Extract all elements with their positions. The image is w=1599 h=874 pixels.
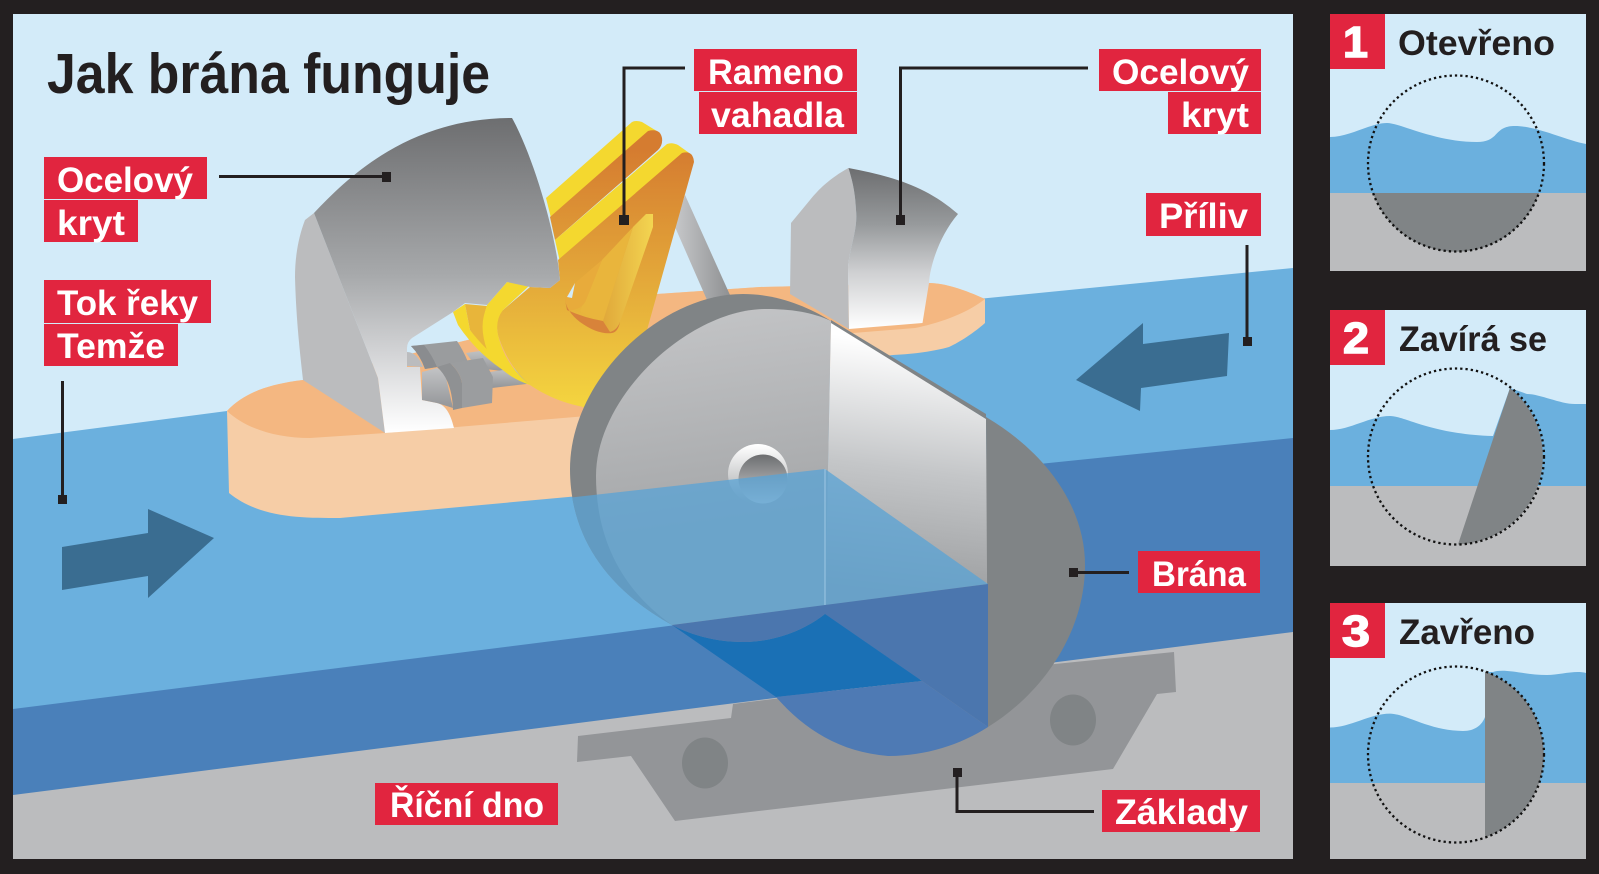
label: steel cover right: [1099, 49, 1261, 135]
arrow: tide: [1076, 323, 1229, 411]
number 3: [1330, 603, 1385, 658]
number 1: [1330, 14, 1385, 69]
rear rod: [466, 350, 510, 372]
label: foundations: Základy: [1115, 793, 1249, 832]
label: steel cover left: Ocelový: [57, 161, 194, 200]
gate face: [596, 309, 831, 642]
water 3: [1330, 671, 1586, 783]
number 2: 2: [1343, 314, 1369, 363]
leader: foundations: [953, 768, 1094, 812]
river bed: [13, 632, 1293, 859]
gate end cap: [986, 417, 1085, 727]
panel: main illustration background: [13, 14, 1293, 859]
heading 3: Zavřeno: [1399, 613, 1535, 652]
label: gate: Brána: [1152, 555, 1246, 594]
label: steel cover right: Ocelový: [1112, 53, 1250, 92]
label: tide: [1146, 193, 1261, 236]
gate section 2: [1458, 388, 1543, 544]
number 2: [1330, 310, 1385, 365]
label: Thames flow: Tok řeky: [57, 284, 199, 323]
gate prism side: [825, 321, 988, 614]
leader: gate: [1069, 568, 1129, 577]
foundation: [577, 652, 1176, 821]
label: river bed: Říční dno: [390, 785, 544, 825]
water 2: [1330, 388, 1586, 486]
front rod: [490, 368, 535, 388]
rocker arm back prongs: [546, 121, 692, 262]
leader: Thames flow: [58, 381, 67, 504]
label: tide: Příliv: [1159, 197, 1249, 236]
light blue river water: [13, 268, 1293, 800]
submerged part of gate: [540, 469, 988, 756]
number 3: 3: [1342, 607, 1370, 656]
dark blue deep water: [13, 438, 1293, 800]
leader: rocker arm: [619, 68, 685, 225]
gate rim: [570, 294, 831, 642]
leader: tide: [1243, 245, 1252, 346]
panel 2: closing: [1330, 310, 1586, 566]
number 1: 1: [1343, 18, 1368, 67]
gate section 3: [1485, 672, 1544, 838]
hydraulic cylinders: [407, 341, 493, 410]
steel cover left: [295, 118, 560, 433]
water 1: [1330, 123, 1586, 193]
panel 3: closed: [1330, 603, 1586, 859]
label: Thames flow: Temže: [57, 327, 165, 366]
heading 1: Otevřeno: [1398, 24, 1555, 63]
label: Thames flow: [44, 280, 211, 366]
heading 2: Zavírá se: [1399, 320, 1547, 359]
leader: steel cover left: [219, 172, 391, 182]
leader: steel cover right: [896, 68, 1088, 225]
panel 1: open: [1330, 14, 1586, 271]
gate top edge: [831, 320, 986, 419]
gate: [570, 294, 1085, 727]
title: Jak brána funguje: [47, 42, 490, 106]
gate pivot: [728, 444, 788, 504]
barge pier: [227, 283, 985, 518]
label: steel cover left: kryt: [57, 204, 125, 243]
label: steel cover right: kryt: [1181, 96, 1249, 135]
rocker arm body: [453, 152, 694, 420]
arrow: river flow: [62, 509, 214, 598]
label: rocker arm: [694, 49, 857, 135]
label: steel cover left: [44, 157, 207, 243]
support strut: [675, 195, 730, 300]
label: rocker arm: Rameno: [708, 53, 844, 92]
label: rocker arm: vahadla: [711, 96, 845, 135]
steel cover right: [790, 168, 958, 329]
gate section 1: [1373, 193, 1539, 252]
